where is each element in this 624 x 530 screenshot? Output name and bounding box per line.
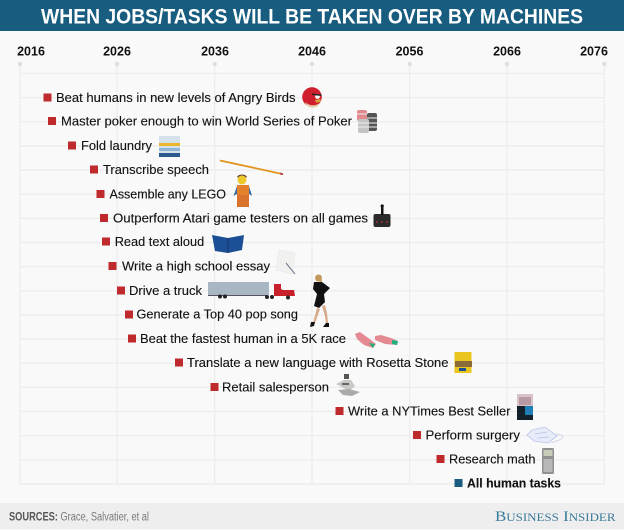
milestone: Rosetta Stone: Translate a new language with Rosetta Stone [187,355,448,370]
icon: lego figure [234,174,252,207]
milestone: poker: Master poker enough to win World Series of Poker [61,114,353,128]
icon: atari joystick [374,204,390,227]
milestone: Atari: Outperform Atari game testers on all games [113,210,368,226]
icon: graphing calculator [542,448,554,474]
icon: blue book [212,235,244,253]
icon: poker chips [357,110,377,133]
icon: surgical mask [527,427,563,443]
title banner: WHEN JOBS/TASKS WILL BE TAKEN OVER BY MACHINES [41,6,583,28]
milestone: research math: Research math [449,452,536,466]
timeline axis years: 2046 [298,44,326,58]
icon: angry bird [302,87,322,108]
timeline axis years: 2016 [17,44,45,58]
sources note: SOURCES: Grace, Salvatier, et al [9,512,149,524]
milestone: Angry Birds: Beat humans in new levels of Angry Birds [56,90,296,105]
timeline axis years: 2036 [201,44,229,58]
timeline axis years [17,44,608,66]
milestone: LEGO: Assemble any LEGO [110,186,226,202]
icon: best seller book [517,394,533,420]
milestone: 5K race: Beat the fastest human in a 5K race [140,331,346,346]
milestone: transcribe: Transcribe speech [103,162,209,177]
icon: rosetta stone box [454,352,472,373]
icon: running shoes [355,332,398,348]
logo: Business Insider: BUSINESS INSIDER [495,509,616,525]
timeline axis years: 2066 [493,44,521,58]
title banner [0,0,624,31]
timeline axis years: 2056 [396,44,423,58]
timeline axis years: 2076 [580,44,608,58]
milestone: surgery: Perform surgery [426,428,520,442]
milestone: essay: Write a high school essay [122,258,270,274]
milestone: best seller: Write a NYTimes Best Seller [348,404,511,418]
icon: pencil [220,160,283,174]
milestone: laundry: Fold laundry [81,138,152,153]
icon: truck [208,282,295,300]
icon: paper and pen [276,250,295,274]
milestone: all human tasks: All human tasks [467,476,561,490]
timeline axis years: 2026 [103,44,131,58]
milestone: truck: Drive a truck [129,283,202,298]
icon: cash register [336,374,360,396]
milestone: retail: Retail salesperson [222,380,329,394]
footer band [0,503,624,530]
milestone: read aloud: Read text aloud [115,234,204,249]
icon: pop singer [310,274,330,327]
icon: folded laundry [159,136,180,157]
milestone: pop song: Generate a Top 40 pop song [136,306,298,322]
